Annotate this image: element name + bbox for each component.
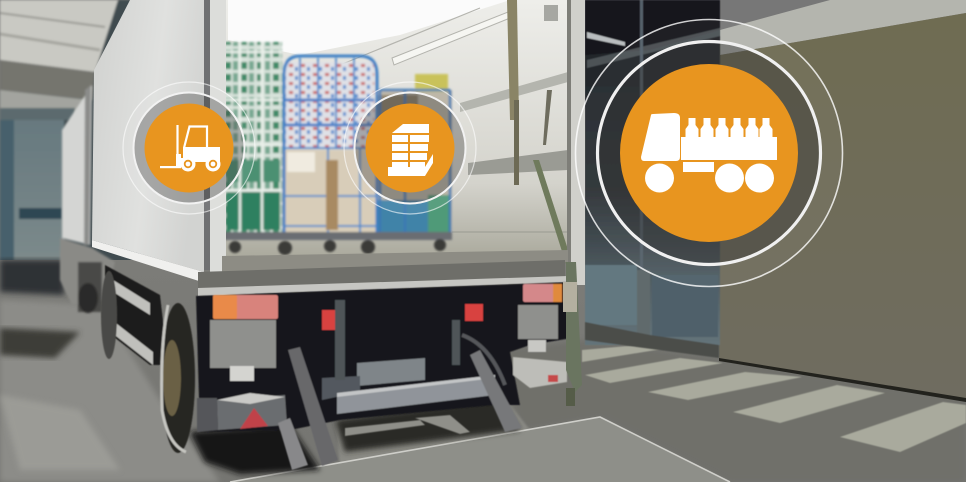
photo background: paved yard bbox=[0, 260, 966, 482]
red reflector squares bbox=[322, 304, 483, 330]
icon: pallet badge bbox=[344, 82, 476, 214]
blue cage bbox=[282, 56, 378, 240]
third cage bbox=[378, 74, 452, 240]
paved ground right bbox=[500, 340, 966, 482]
icon: forklift badge bbox=[123, 82, 255, 214]
rear tyre bbox=[161, 303, 195, 453]
right side lamp block bbox=[513, 340, 567, 388]
door side wall bbox=[0, 120, 14, 265]
truck interior bbox=[226, 0, 571, 262]
truck undercarriage bbox=[101, 265, 575, 470]
wall rails bbox=[460, 72, 568, 112]
green cage bbox=[224, 42, 282, 232]
ceiling light tube bbox=[392, 12, 510, 65]
support arms bbox=[278, 335, 522, 470]
cage wheels bbox=[224, 232, 452, 255]
roller door bbox=[14, 120, 64, 262]
left bumper with warning triangle bbox=[197, 393, 287, 432]
painted floor stripes bbox=[582, 345, 966, 452]
cobbled ground left bbox=[0, 300, 220, 482]
hanging ratchet strap bbox=[563, 262, 582, 406]
dark ground near door bbox=[0, 260, 64, 295]
under-truck ground shadow bbox=[190, 398, 520, 474]
glass entrance doors bbox=[585, 0, 720, 358]
second truck behind bbox=[60, 85, 115, 313]
cargo roll cages bbox=[224, 42, 452, 255]
lit ground under truck bbox=[335, 392, 530, 466]
ground light stripes below bar bbox=[345, 415, 470, 436]
right tail light bbox=[523, 284, 562, 302]
truck side panel bbox=[92, 0, 226, 292]
truck with bottles glyph bbox=[641, 113, 777, 192]
building wall on the right bbox=[719, 0, 966, 402]
ceiling beams bbox=[0, 0, 118, 120]
truck cargo bed bbox=[198, 250, 568, 296]
left tail light bbox=[213, 295, 278, 319]
pallet glyph bbox=[388, 124, 433, 176]
right door post bbox=[567, 0, 585, 285]
forklift glyph bbox=[160, 125, 220, 172]
underrun tray and bar bbox=[322, 300, 495, 414]
side guard rails bbox=[101, 265, 168, 365]
cargo straps bbox=[507, 0, 572, 264]
photo background: dock building on the left bbox=[0, 0, 140, 300]
mud plates bbox=[210, 305, 558, 381]
icon: delivery truck badge bbox=[576, 20, 842, 286]
dock leveller plate bbox=[230, 417, 730, 482]
